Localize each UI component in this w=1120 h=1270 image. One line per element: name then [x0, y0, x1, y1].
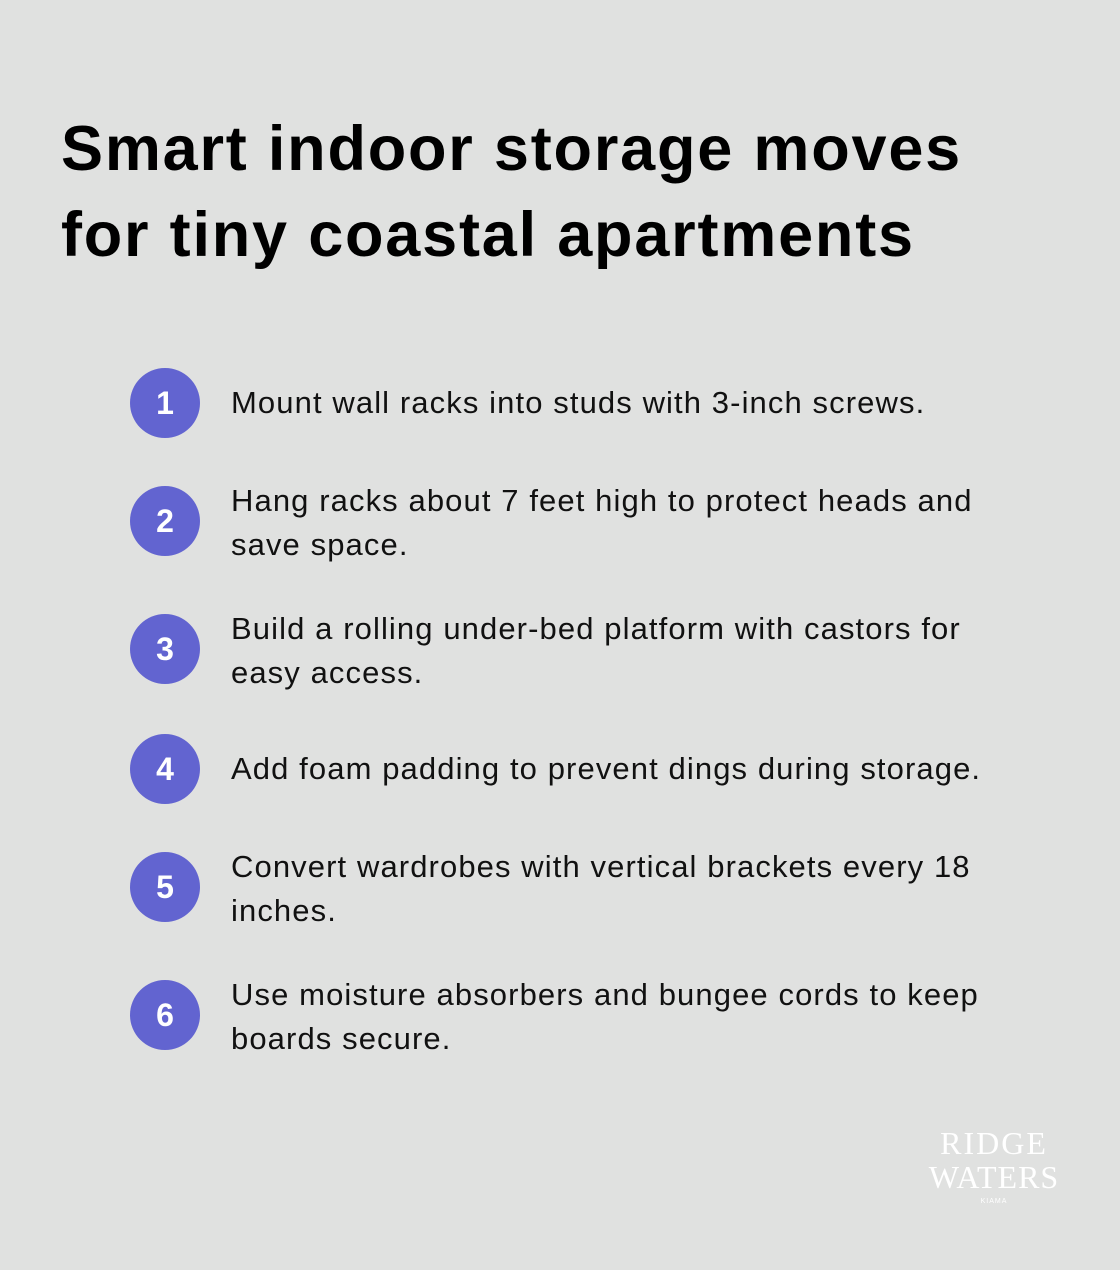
- item 6: [130, 977, 979, 1056]
- text 5: Convert wardrobes with vertical brackets every 18: [231, 849, 971, 884]
- logo: [928, 1125, 1059, 1205]
- text 6: boards secure.: [231, 1021, 451, 1056]
- title: [61, 114, 962, 270]
- logo: KIAMA: [981, 1198, 1007, 1205]
- badge 4: [130, 734, 200, 804]
- text 2: Hang racks about 7 feet high to protect heads and: [231, 483, 973, 518]
- text 3: easy access.: [231, 655, 423, 690]
- badge 3: [130, 614, 200, 684]
- logo: RIDGE: [940, 1125, 1048, 1161]
- badge 6: 6: [156, 997, 174, 1033]
- text 6: Use moisture absorbers and bungee cords to keep: [231, 977, 979, 1012]
- badge 5: [130, 852, 200, 922]
- badge 1: 1: [156, 385, 174, 421]
- logo: WATERS: [929, 1159, 1059, 1195]
- badge 4: 4: [156, 751, 174, 787]
- badge 2: [130, 486, 200, 556]
- item 4: [130, 734, 981, 804]
- item 5: [130, 849, 971, 928]
- text 3: Build a rolling under-bed platform with castors for: [231, 611, 961, 646]
- item 1: [130, 368, 925, 438]
- text 3: [231, 611, 961, 690]
- text 2: [231, 483, 973, 562]
- text 1: Mount wall racks into studs with 3-inch screws.: [231, 385, 925, 420]
- item 3: [130, 611, 961, 690]
- badge 1: [130, 368, 200, 438]
- title: Smart indoor storage moves: [61, 114, 962, 184]
- text 5: [231, 849, 971, 928]
- text 4: Add foam padding to prevent dings during storage.: [231, 751, 981, 786]
- badge 3: 3: [156, 631, 174, 667]
- text 2: save space.: [231, 527, 409, 562]
- item 2: [130, 483, 973, 562]
- badge 5: 5: [156, 869, 174, 905]
- badge 2: 2: [156, 503, 174, 539]
- title: for tiny coastal apartments: [61, 200, 915, 270]
- badge 6: [130, 980, 200, 1050]
- text 6: [231, 977, 979, 1056]
- text 5: inches.: [231, 893, 337, 928]
